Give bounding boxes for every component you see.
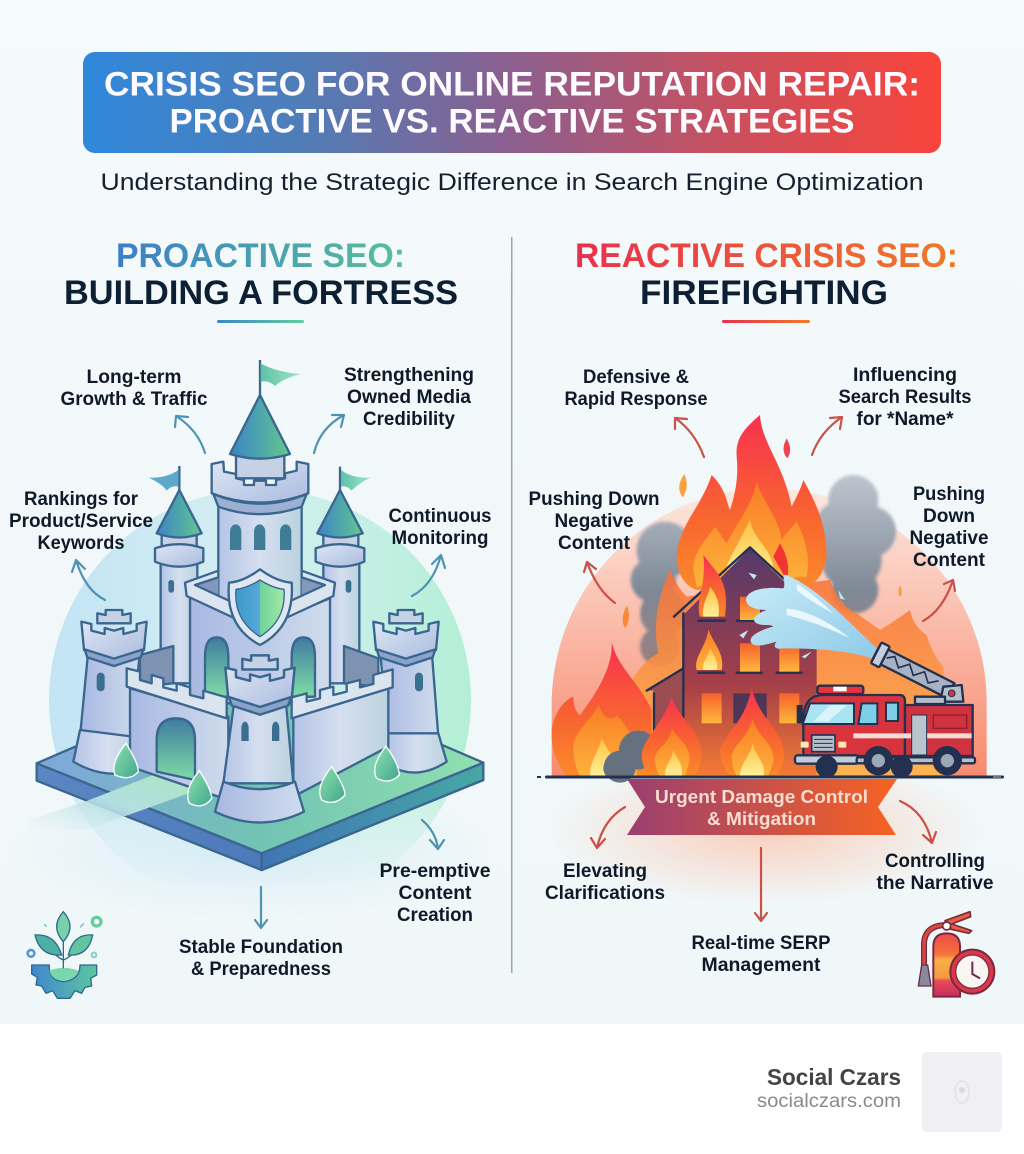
background flames xyxy=(630,570,943,775)
label: real-time serp xyxy=(692,933,831,976)
ribbon: urgent damage control xyxy=(627,779,897,835)
label: stable foundation: Stable Foundation xyxy=(179,937,343,958)
label: rankings: Product/Service xyxy=(9,511,153,532)
heading: proactive: PROACTIVE SEO: xyxy=(116,237,405,275)
label: strengthening owned media xyxy=(344,365,474,430)
dome backdrop xyxy=(552,488,987,777)
label: defensive and rapid response: Rapid Response xyxy=(564,389,708,410)
icon: fire extinguisher and clock xyxy=(918,912,994,997)
label: influencing search results xyxy=(838,365,972,430)
shield emblem xyxy=(229,569,292,645)
subtitle: Understanding the Strategic Difference in Search Engine Optimization xyxy=(100,169,924,196)
label: rankings: Rankings for xyxy=(24,489,139,510)
water jet xyxy=(739,573,877,658)
right corner tower xyxy=(373,610,447,773)
heading: reactive xyxy=(575,237,958,323)
brand logo placeholder xyxy=(922,1052,1002,1132)
label: long-term growth: Growth & Traffic xyxy=(60,389,208,410)
arrow: influencing xyxy=(812,417,842,455)
smoke base xyxy=(603,731,658,783)
label: pushing down right: Content xyxy=(913,550,986,571)
footer background xyxy=(0,1024,1024,1154)
arrow: elevating xyxy=(591,807,625,848)
heading: reactive: REACTIVE CRISIS SEO: xyxy=(575,237,958,275)
label: pushing down right: Negative xyxy=(910,528,988,549)
icon: plant and gear xyxy=(28,912,101,998)
house xyxy=(647,543,817,775)
label: pre-emptive content: Content xyxy=(398,883,472,904)
fire truck ladder xyxy=(871,642,956,701)
label: influencing search results: Search Results xyxy=(838,387,972,408)
hedges xyxy=(114,743,399,806)
illustration: burning house and fire truck xyxy=(552,415,987,783)
illustration: castle fortress xyxy=(30,360,483,870)
label: influencing search results: for *Name* xyxy=(856,409,954,430)
label: stable foundation xyxy=(179,937,343,980)
brand url: socialczars.com xyxy=(757,1091,901,1112)
right small tower xyxy=(316,467,371,683)
label: strengthening owned media: Credibility xyxy=(363,409,455,430)
label: pre-emptive content: Creation xyxy=(397,905,473,926)
label: rankings xyxy=(9,489,153,554)
label: controlling the narrative: the Narrative xyxy=(876,873,994,894)
smoke right xyxy=(815,475,896,613)
ribbon: urgent damage control: Urgent Damage Control xyxy=(655,787,868,807)
label: pushing down right: Pushing xyxy=(913,484,985,505)
heading: proactive xyxy=(64,237,458,323)
label: real-time serp: Real-time SERP xyxy=(692,933,831,954)
title: CRISIS SEO FOR ONLINE REPUTATION REPAIR: xyxy=(104,66,920,104)
left small tower xyxy=(148,466,203,683)
label: defensive and rapid response: Defensive & xyxy=(583,367,689,388)
arrow: controlling xyxy=(900,801,936,843)
label: rankings: Keywords xyxy=(38,533,124,554)
label: pushing down left: Pushing Down xyxy=(528,489,660,510)
bottom flames xyxy=(642,687,784,776)
label: strengthening owned media: Owned Media xyxy=(347,387,471,408)
fire truck xyxy=(795,685,975,778)
label: pre-emptive content: Pre-emptive xyxy=(380,861,490,882)
castle keep xyxy=(185,571,335,703)
label: controlling the narrative: Controlling xyxy=(885,851,985,872)
label: real-time serp: Management xyxy=(702,955,821,976)
label: continuous monitoring: Monitoring xyxy=(392,528,488,549)
label: continuous monitoring xyxy=(388,506,492,549)
main flame xyxy=(677,415,827,590)
label: long-term growth: Long-term xyxy=(86,367,182,388)
center divider xyxy=(511,237,512,973)
label: influencing search results: Influencing xyxy=(853,365,957,386)
label: pre-emptive content xyxy=(380,861,490,926)
arrow: continuous xyxy=(412,555,445,596)
arrow: defensive xyxy=(675,418,704,457)
label: elevating clarifications xyxy=(545,861,665,904)
gate arch xyxy=(157,718,195,780)
label: pushing down left: Content xyxy=(558,533,631,554)
label: elevating clarifications: Clarifications xyxy=(545,883,665,904)
label: pushing down left: Negative xyxy=(554,511,634,532)
ground line xyxy=(537,776,1004,778)
label: pushing down right xyxy=(910,484,988,571)
label: controlling the narrative xyxy=(876,851,994,894)
arrow: long-term growth xyxy=(175,416,205,453)
left corner tower xyxy=(73,610,147,774)
glow behind castle xyxy=(10,780,490,920)
arrow: pushing down right xyxy=(923,580,955,621)
left flame xyxy=(552,642,652,776)
heading: proactive: BUILDING A FORTRESS xyxy=(64,274,458,312)
arrow: real-time xyxy=(755,848,767,921)
label: continuous monitoring: Continuous xyxy=(388,506,492,527)
arrow: pushing down left xyxy=(584,562,615,603)
heading: reactive: FIREFIGHTING xyxy=(640,274,888,312)
label: strengthening owned media: Strengthening xyxy=(344,365,474,386)
arrow: pre-emptive xyxy=(422,820,444,849)
arrow: strengthening xyxy=(314,415,344,453)
arrow: rankings xyxy=(72,560,105,600)
castle platform xyxy=(37,667,483,870)
title banner xyxy=(83,52,941,153)
front tower xyxy=(215,655,304,822)
title: PROACTIVE VS. REACTIVE STRATEGIES xyxy=(170,102,854,140)
label: defensive and rapid response xyxy=(564,367,708,410)
smoke left xyxy=(631,522,693,667)
central tower xyxy=(212,360,308,617)
left wall xyxy=(127,668,228,800)
circle behind castle xyxy=(49,494,471,860)
ember sparks xyxy=(623,438,902,628)
label: elevating clarifications: Elevating xyxy=(563,861,647,882)
right wall xyxy=(292,669,393,797)
title xyxy=(104,66,920,140)
label: pushing down right: Down xyxy=(923,506,975,527)
label: stable foundation: & Preparedness xyxy=(191,959,331,980)
ribbon: urgent damage control: & Mitigation xyxy=(707,809,816,829)
label: pushing down left xyxy=(528,489,660,554)
label: long-term growth xyxy=(60,367,208,410)
brand name: Social Czars xyxy=(767,1064,901,1090)
back walls xyxy=(140,646,378,687)
road xyxy=(30,772,193,830)
glow below fire xyxy=(550,755,980,905)
arrow: stable foundation xyxy=(255,887,267,928)
